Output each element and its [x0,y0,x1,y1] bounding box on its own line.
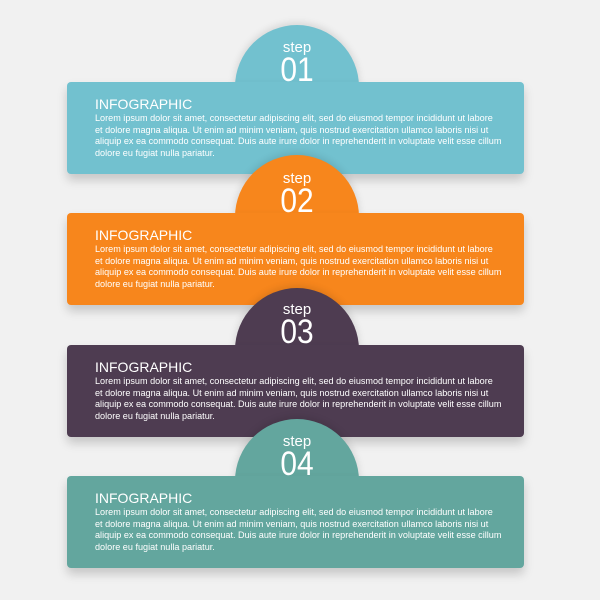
heading: INFOGRAPHIC [95,490,192,506]
step 1 label: 01 [280,51,314,89]
body text: aliquip ex ea commodo consequat. Duis aute irure dolor in reprehenderit in voluptate velit esse cillum [95,530,501,540]
body text: aliquip ex ea commodo consequat. Duis aute irure dolor in reprehenderit in voluptate velit esse cillum [95,399,501,409]
body text: et dolore magna aliqua. Ut enim ad minim veniam, quis nostrud exercitation ullamco laboris nisi ut [95,518,488,528]
body text: dolore eu fugiat nulla pariatur. [95,148,215,158]
body text: Lorem ipsum dolor sit amet, consectetur adipiscing elit, sed do eiusmod tempor incididunt ut labore [95,507,493,517]
body text: et dolore magna aliqua. Ut enim ad minim veniam, quis nostrud exercitation ullamco laboris nisi ut [95,256,488,266]
step 1 label: step [283,39,311,56]
body text: aliquip ex ea commodo consequat. Duis aute irure dolor in reprehenderit in voluptate velit esse cillum [95,267,501,277]
step 2 label: step [283,170,311,187]
body text: et dolore magna aliqua. Ut enim ad minim veniam, quis nostrud exercitation ullamco laboris nisi ut [95,388,488,398]
body text: et dolore magna aliqua. Ut enim ad minim veniam, quis nostrud exercitation ullamco laboris nisi ut [95,124,488,134]
body text: Lorem ipsum dolor sit amet, consectetur adipiscing elit, sed do eiusmod tempor incididunt ut labore [95,376,493,386]
step 2 dome [235,155,359,279]
step 1 dome [235,25,359,149]
panel: step 3 [67,345,524,437]
body text [95,113,501,158]
body text [95,376,501,421]
panel: step 2 [67,213,524,305]
heading: INFOGRAPHIC [95,359,192,375]
body text: aliquip ex ea commodo consequat. Duis aute irure dolor in reprehenderit in voluptate velit esse cillum [95,136,501,146]
step 3 label: step [283,301,311,318]
step 4 label: step [283,433,311,450]
body text: dolore eu fugiat nulla pariatur. [95,410,215,420]
body text [95,507,501,552]
body text: dolore eu fugiat nulla pariatur. [95,278,215,288]
heading: INFOGRAPHIC [95,227,192,243]
heading: INFOGRAPHIC [95,96,192,112]
step 2 label: 02 [280,182,314,220]
step 4 dome [235,419,359,543]
body text: dolore eu fugiat nulla pariatur. [95,542,215,552]
body text: Lorem ipsum dolor sit amet, consectetur adipiscing elit, sed do eiusmod tempor incididunt ut labore [95,244,493,254]
step 3 label: 03 [280,313,314,351]
body text [95,244,501,289]
panel: step 4 [67,476,524,568]
body text: Lorem ipsum dolor sit amet, consectetur adipiscing elit, sed do eiusmod tempor incididunt ut labore [95,113,493,123]
step 4 label: 04 [280,445,314,483]
step 3 dome [235,288,359,412]
panel: step 1 [67,82,524,174]
